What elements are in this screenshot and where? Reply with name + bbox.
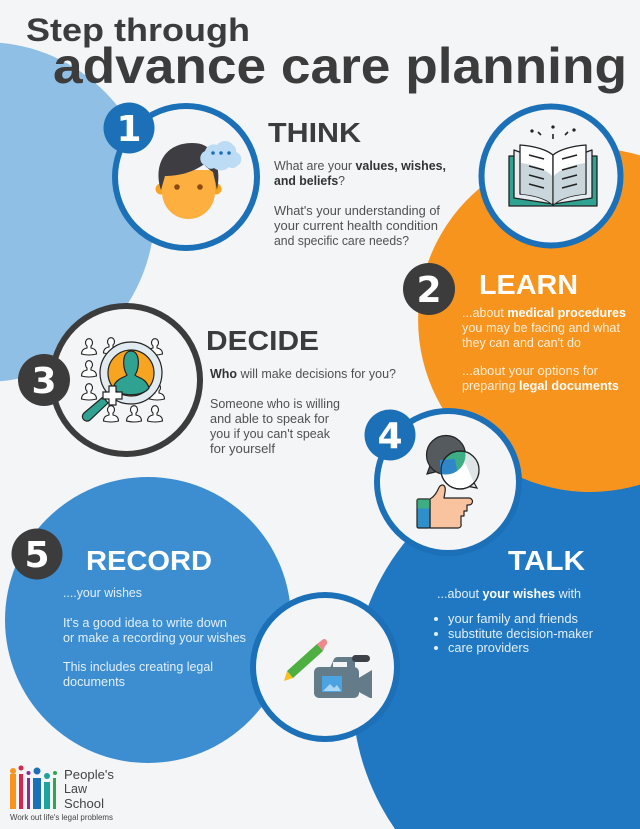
text: logo name: Law [64, 782, 88, 796]
icon: pencil [284, 639, 327, 681]
panel: talk [434, 545, 594, 655]
icon ring: open book [482, 106, 620, 246]
background circle: orange [418, 148, 640, 492]
icon: book [509, 126, 597, 206]
text: record body [63, 585, 246, 689]
text: tagline: Work out life's legal problems [10, 812, 113, 822]
text: talk body: your family and friends [448, 611, 578, 626]
text: record body: This includes creating legal [63, 659, 213, 674]
icon: speech bubbles [426, 436, 479, 489]
badge: 5 [12, 528, 62, 580]
text: decide body [210, 366, 396, 456]
text: think body: and beliefs? [274, 173, 345, 188]
text: think body: your current health condition [274, 218, 438, 233]
text: logo name: People's [64, 768, 114, 782]
title: advance care planning [53, 38, 627, 94]
panel: record [63, 545, 246, 689]
heading: think: THINK [268, 117, 361, 148]
text: talk body: care providers [448, 640, 529, 655]
text: decide body: for yourself [210, 441, 275, 456]
text: record body: documents [63, 674, 125, 689]
icon ring: talk [377, 411, 519, 553]
logo: People's Law School [10, 766, 114, 822]
icon: thumbs up [417, 485, 472, 528]
text: think body: What are your values, wishes, [274, 158, 446, 173]
badge: 3 [18, 354, 70, 406]
title: Step through [26, 12, 250, 48]
icon ring: pencil and camera [253, 595, 397, 739]
text: learn body [462, 305, 626, 393]
background circle: dark blue [352, 452, 640, 829]
text: talk body: substitute decision-maker [448, 626, 594, 641]
text: decide body: and able to speak for [210, 411, 330, 426]
heading: learn: LEARN [479, 269, 578, 300]
icon: logo figures [10, 766, 57, 809]
text: think body: What's your understanding of [274, 203, 440, 218]
text: logo name: School [64, 797, 104, 811]
text: decide body: Who will make decisions for you? [210, 366, 396, 381]
text: learn body: you may be facing and what [462, 320, 620, 335]
text: record body: It's a good idea to write down [63, 615, 227, 630]
text: decide body: you if you can't speak [210, 426, 331, 441]
badge: 1: 1 [116, 109, 142, 150]
icon: magnifying glass [82, 342, 162, 421]
text: record body: ....your wishes [63, 585, 142, 600]
text: learn body: ...about medical procedures [462, 305, 626, 320]
panel: learn [462, 269, 626, 393]
icon: crowd [82, 338, 164, 422]
text: talk body: ...about your wishes with [437, 586, 581, 601]
text: think body: and specific care needs? [274, 233, 409, 248]
text: learn body: they can and can't do [462, 335, 581, 350]
panel: decide [206, 325, 396, 456]
text: record body: or make a recording your wishes [63, 630, 246, 645]
badge: 4: 4 [377, 416, 403, 457]
panel: think [268, 117, 446, 248]
badge: 4 [364, 410, 416, 460]
badge: 2 [403, 263, 455, 315]
background circle: light blue [0, 43, 155, 381]
heading: decide: DECIDE [206, 325, 319, 356]
badge: 2: 2 [416, 270, 442, 311]
background circle: medium blue [5, 477, 291, 763]
title [26, 12, 627, 94]
icon: head [156, 143, 222, 219]
text: learn body: ...about your options for [462, 363, 599, 378]
icon ring: head thinking [115, 106, 257, 248]
text: talk body [434, 586, 594, 655]
heading: talk: TALK [508, 545, 585, 576]
text: logo name [64, 768, 114, 811]
text: learn body: preparing legal documents [462, 378, 619, 393]
icon ring: person search [52, 306, 200, 454]
badge: 1 [104, 102, 154, 154]
heading: record: RECORD [86, 545, 212, 576]
badge: 5: 5 [24, 535, 50, 576]
badge: 3: 3 [31, 361, 57, 402]
icon: thought bubble [200, 141, 241, 170]
text: think body [274, 158, 446, 248]
text: decide body: Someone who is willing [210, 396, 340, 411]
icon: video camera [314, 655, 372, 698]
